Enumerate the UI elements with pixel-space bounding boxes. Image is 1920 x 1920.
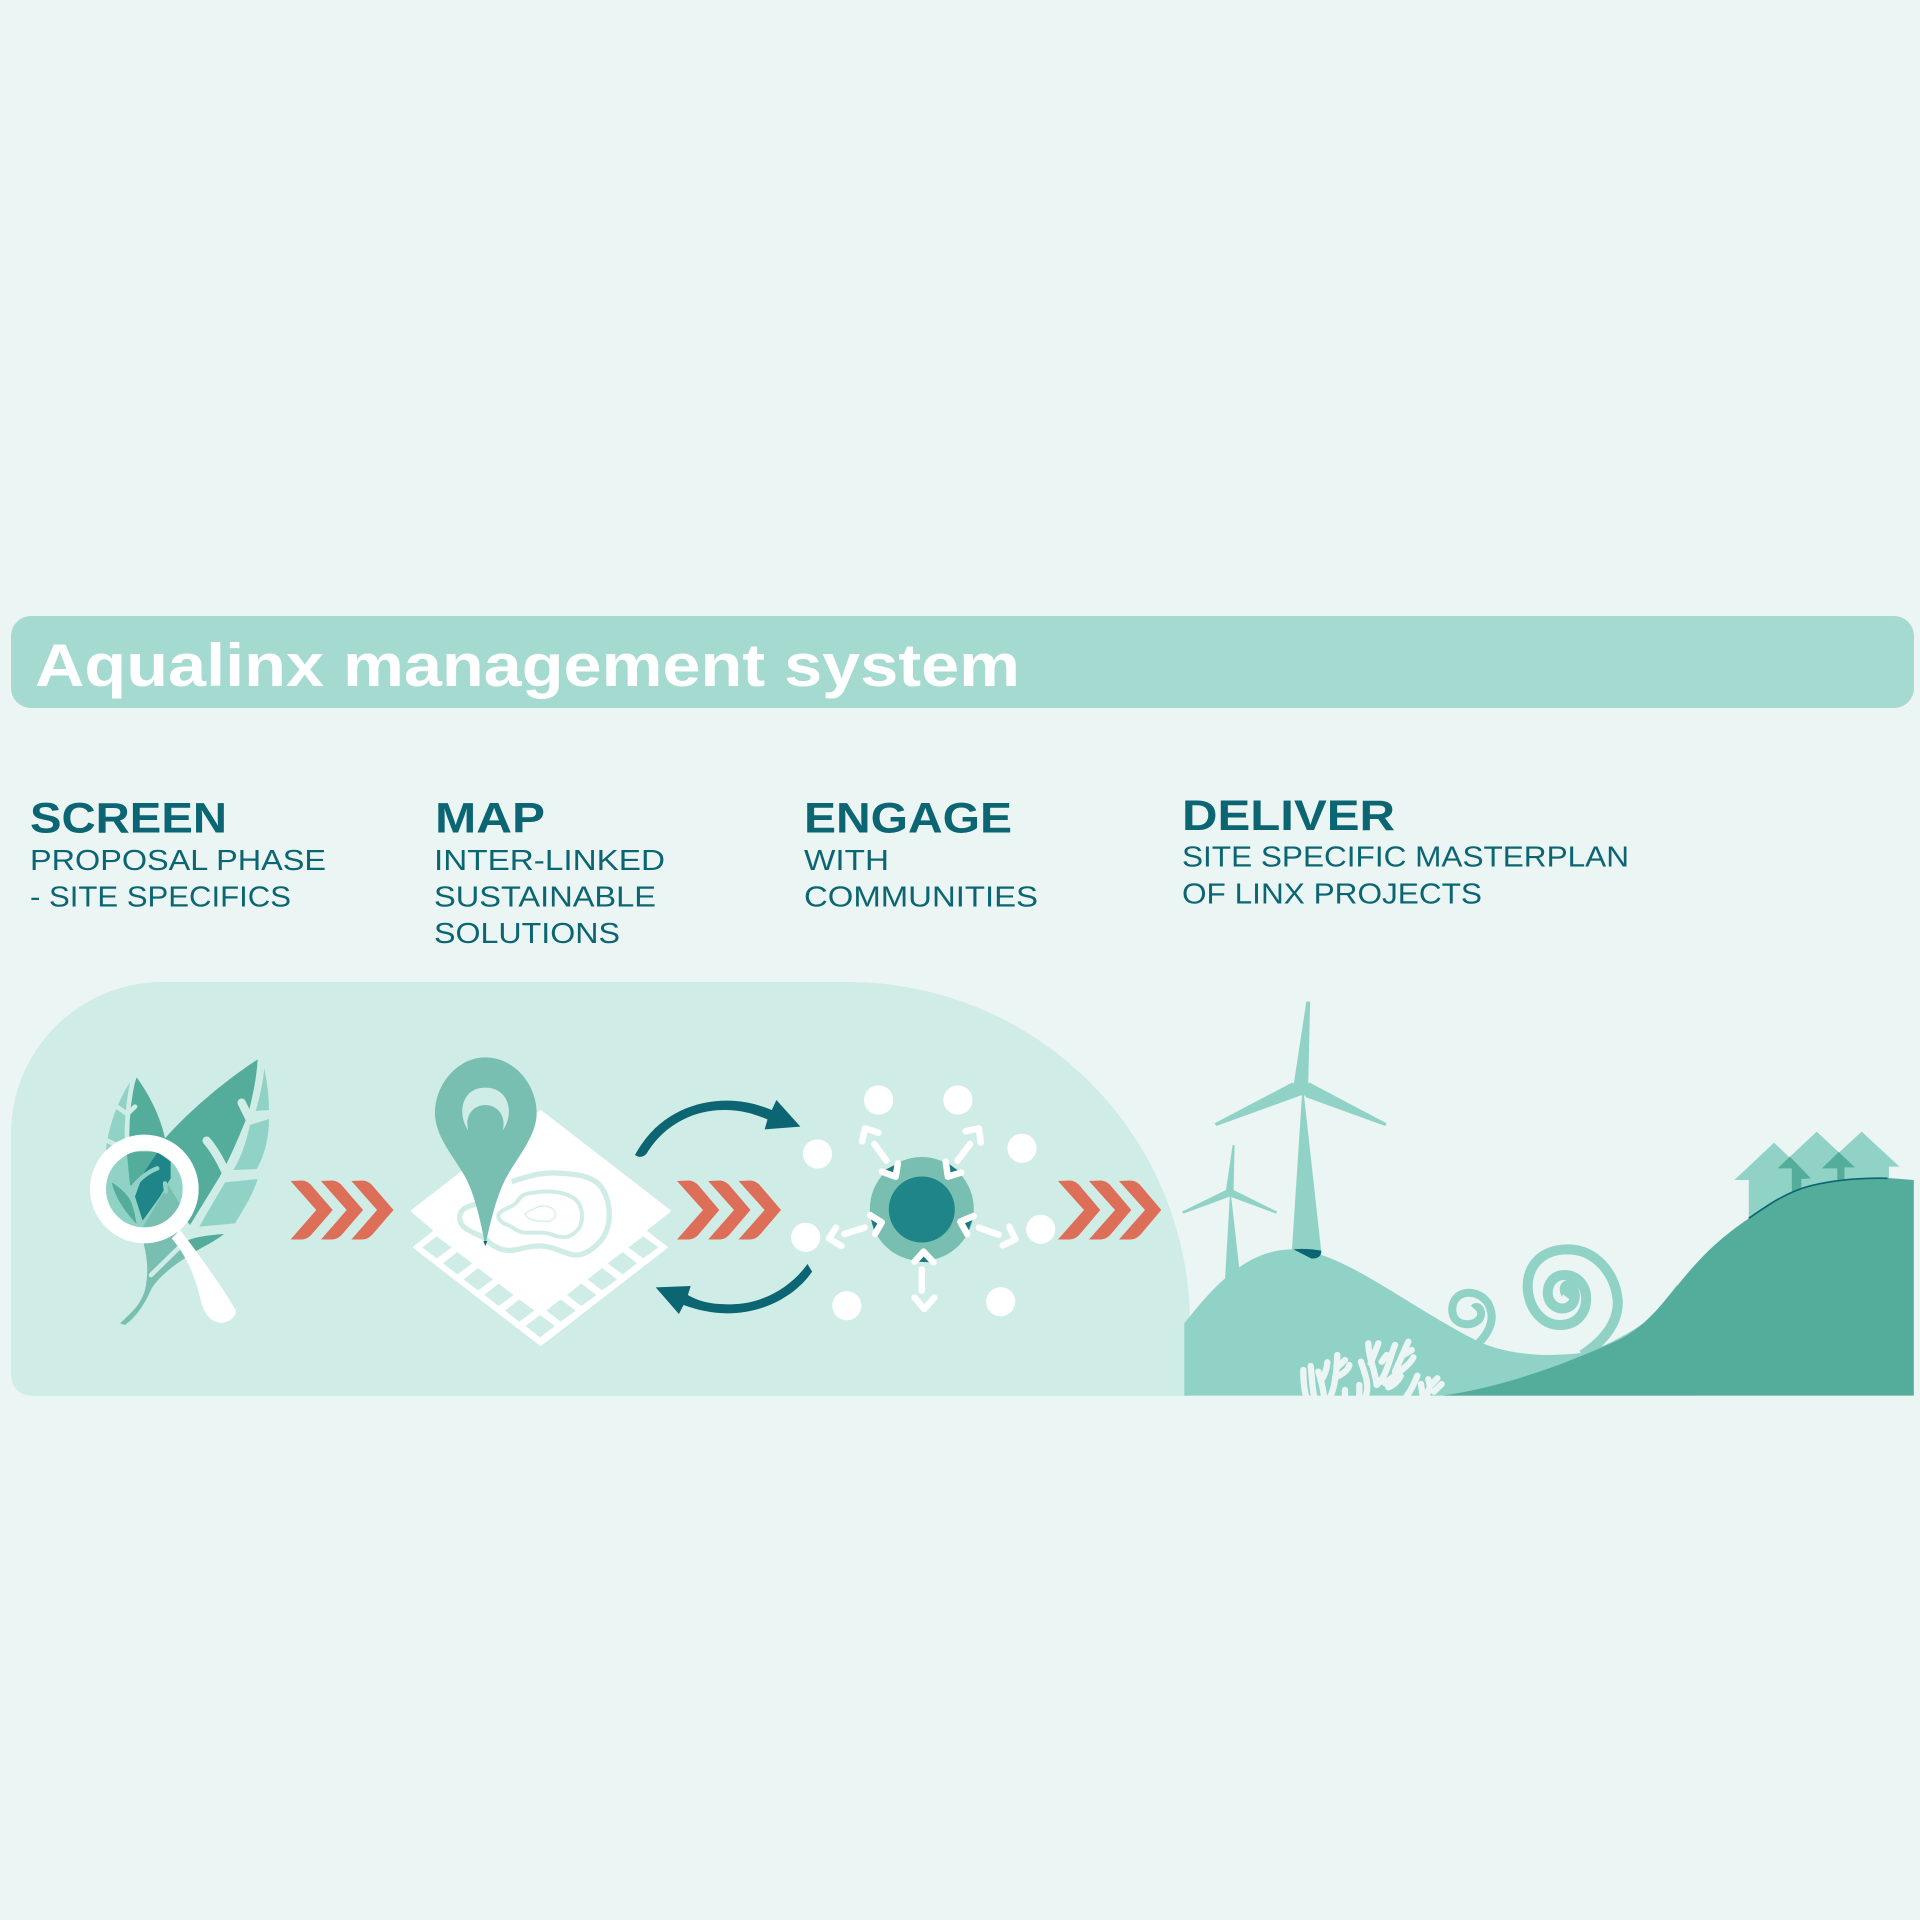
dark hill [1443, 1178, 1914, 1396]
arrow: curved bottom [656, 1264, 812, 1314]
icon: map with location pin [412, 1057, 670, 1345]
step text: map: MAP [435, 794, 545, 842]
arrow: curved feedback arrows [635, 1100, 812, 1314]
light hill [1184, 1249, 1696, 1396]
step text: engage: COMMUNITIES [804, 882, 1038, 914]
front leaf [157, 1059, 269, 1227]
title banner: Aqualinx management system [35, 632, 1020, 699]
magnifying glass [98, 1143, 236, 1323]
step text: deliver [1182, 792, 1629, 910]
step text: map: INTER-LINKED [434, 845, 665, 877]
step text: screen: - SITE SPECIFICS [30, 882, 291, 914]
houses [1734, 1132, 1899, 1222]
central hub [870, 1157, 974, 1261]
step text: screen: PROPOSAL PHASE [30, 845, 326, 877]
step text: deliver: DELIVER [1182, 792, 1395, 840]
step text: engage: WITH [804, 845, 889, 877]
step text: map: SUSTAINABLE [434, 882, 656, 914]
step text: engage: ENGAGE [804, 794, 1012, 842]
step text: map [434, 794, 665, 950]
turbine base [1293, 1249, 1321, 1259]
step text: map: SOLUTIONS [434, 918, 620, 950]
arrow: chevrons screen to map [291, 1180, 394, 1240]
arrow: chevrons map to engage [677, 1180, 781, 1240]
spirals [1452, 1249, 1618, 1355]
wind turbines [1182, 1002, 1387, 1280]
illustration: deliver landscape [1182, 1002, 1914, 1396]
location pin [435, 1057, 537, 1246]
icon: community engagement network [791, 1085, 1055, 1320]
community dots [791, 1085, 1055, 1320]
icon: leaf under magnifying glass [98, 1059, 269, 1325]
arrow: curved top [635, 1100, 800, 1157]
arrow: chevrons engage to deliver [1058, 1180, 1161, 1240]
lens contents [105, 1150, 184, 1228]
hill outline [1749, 1178, 1887, 1218]
step text: deliver: OF LINX PROJECTS [1182, 878, 1482, 910]
dashed two-way arrows [829, 1128, 1015, 1309]
step text: screen [30, 794, 326, 914]
step text: screen: SCREEN [30, 794, 227, 842]
step text: engage [804, 794, 1038, 914]
panel: process background [11, 982, 1190, 1396]
back leaf [106, 1077, 165, 1190]
title banner [11, 616, 1914, 708]
contour lines [460, 1173, 609, 1255]
leaf stem [120, 1232, 224, 1325]
map sheets [412, 1111, 670, 1345]
illustration: coral [1303, 1342, 1442, 1396]
step text: deliver: SITE SPECIFIC MASTERPLAN [1182, 842, 1629, 874]
